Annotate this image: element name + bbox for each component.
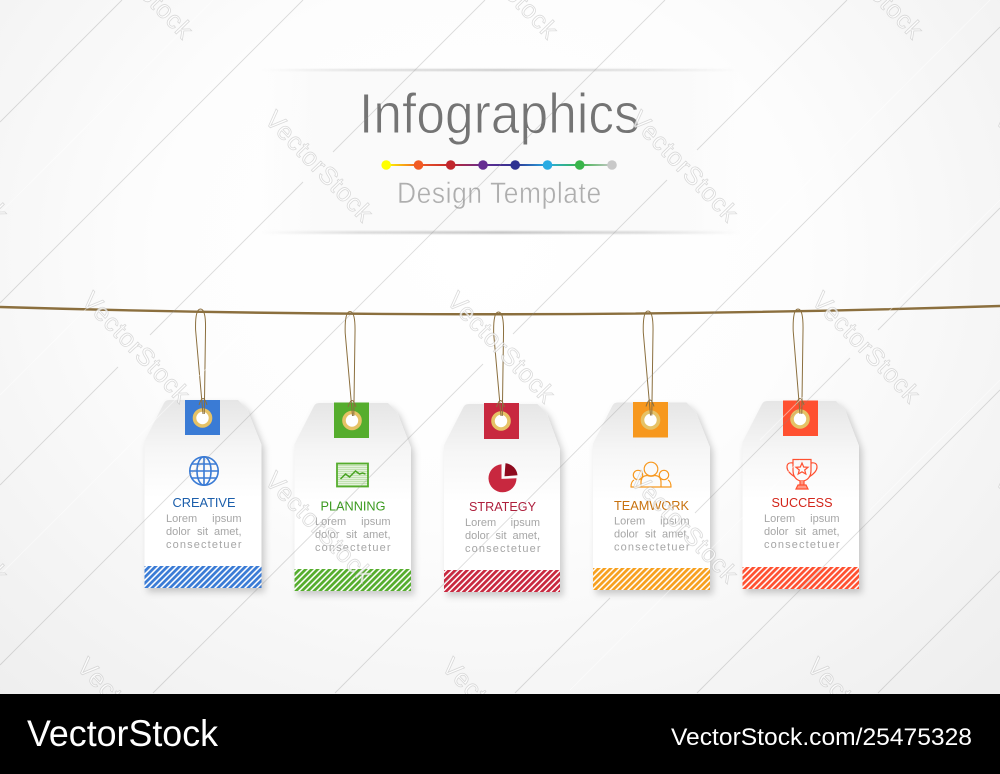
- striped band success: [742, 567, 859, 589]
- rope: [0, 306, 1000, 314]
- body text success: amet,: [812, 526, 840, 538]
- heading teamwork: TEAMWORK: [614, 498, 689, 513]
- body text creative: amet,: [214, 526, 242, 538]
- striped band teamwork: [593, 568, 710, 590]
- body text planning: sit: [346, 529, 357, 541]
- body text creative: ipsum: [212, 513, 242, 525]
- body text planning: consectetuer: [315, 542, 391, 554]
- icon: trophy: [787, 460, 817, 489]
- eyelet strategy: [493, 413, 509, 429]
- tag: strategy: [444, 312, 560, 592]
- body text strategy: consectetuer: [465, 543, 541, 555]
- body text success: consectetuer: [764, 539, 840, 551]
- body text planning: dolor: [315, 529, 340, 541]
- body text creative: Lorem: [166, 513, 197, 525]
- tag: success: [742, 309, 859, 589]
- heading creative: CREATIVE: [172, 495, 236, 510]
- color tab creative: [185, 400, 220, 435]
- footer url: VectorStock.com/25475328: [671, 724, 972, 751]
- title panel: [262, 69, 740, 234]
- body text strategy: amet,: [512, 530, 540, 542]
- body text creative: sit: [197, 526, 208, 538]
- body text success: [764, 513, 840, 551]
- striped band creative: [144, 566, 262, 588]
- string success: [793, 309, 804, 414]
- title: Infographics: [359, 83, 640, 146]
- body text teamwork: consectetuer: [614, 542, 690, 554]
- tag body creative: [144, 400, 262, 588]
- body text planning: [315, 516, 391, 554]
- heading strategy: STRATEGY: [469, 499, 536, 514]
- color tab success: [783, 400, 818, 436]
- icon: team: [630, 462, 672, 487]
- watermark text: VectorStock: [806, 287, 925, 409]
- body text strategy: [465, 517, 541, 555]
- tag body planning: [294, 403, 411, 591]
- footer brand: VectorStock: [27, 713, 218, 754]
- body text strategy: dolor: [465, 530, 490, 542]
- string planning: [345, 312, 356, 416]
- watermark text: VectorStock: [259, 467, 378, 589]
- body text planning: amet,: [363, 529, 390, 541]
- watermark text: VectorStock: [801, 653, 920, 774]
- tag: teamwork: [593, 311, 710, 590]
- eyelet success: [792, 411, 808, 427]
- icon: globe: [190, 457, 218, 485]
- body text creative: dolor: [166, 526, 191, 538]
- body text success: Lorem: [764, 513, 795, 525]
- icon: pie chart: [489, 463, 518, 492]
- watermark text: VectorStock: [624, 106, 743, 228]
- body text creative: consectetuer: [166, 539, 242, 551]
- string teamwork: [643, 311, 654, 416]
- body text teamwork: sit: [645, 528, 656, 540]
- string strategy: [494, 312, 504, 416]
- subtitle: Design Template: [397, 175, 601, 209]
- body text planning: Lorem: [315, 516, 346, 528]
- watermark text: VectorStock: [71, 653, 190, 774]
- body text success: sit: [795, 526, 806, 538]
- string creative: [196, 309, 207, 414]
- watermark text: VectorStock: [441, 287, 560, 409]
- body text teamwork: ipsum: [660, 516, 690, 528]
- footer bar: [0, 694, 1000, 774]
- heading success: SUCCESS: [772, 495, 833, 510]
- watermark text: VectorStock: [436, 653, 555, 774]
- colored dot timeline: [381, 160, 617, 170]
- body text success: ipsum: [810, 513, 840, 525]
- body text creative: [166, 513, 242, 551]
- body text teamwork: [614, 516, 690, 554]
- tag: creative: [144, 309, 262, 588]
- eyelet creative: [194, 410, 210, 426]
- body text strategy: ipsum: [511, 517, 540, 529]
- eyelet teamwork: [642, 412, 658, 428]
- body text teamwork: amet,: [662, 528, 690, 540]
- body text planning: ipsum: [361, 516, 390, 528]
- body text success: dolor: [764, 526, 789, 538]
- color tab teamwork: [633, 402, 668, 438]
- body text strategy: Lorem: [465, 517, 496, 529]
- tag body strategy: [444, 404, 560, 592]
- tag body teamwork: [593, 402, 710, 590]
- color tab strategy: [484, 403, 519, 439]
- watermark text: VectorStock: [259, 106, 378, 228]
- icon: line chart: [337, 464, 368, 486]
- tag body success: [742, 401, 859, 589]
- body text teamwork: Lorem: [614, 516, 645, 528]
- watermark text: VectorStock: [76, 287, 195, 409]
- body text teamwork: dolor: [614, 528, 639, 540]
- striped band planning: [294, 569, 411, 591]
- eyelet planning: [344, 412, 360, 428]
- heading planning: PLANNING: [320, 498, 386, 514]
- watermark text: VectorStock: [624, 467, 743, 589]
- tag: planning: [294, 312, 411, 591]
- striped band strategy: [444, 570, 560, 592]
- color tab planning: [334, 402, 369, 438]
- body text strategy: sit: [496, 530, 506, 542]
